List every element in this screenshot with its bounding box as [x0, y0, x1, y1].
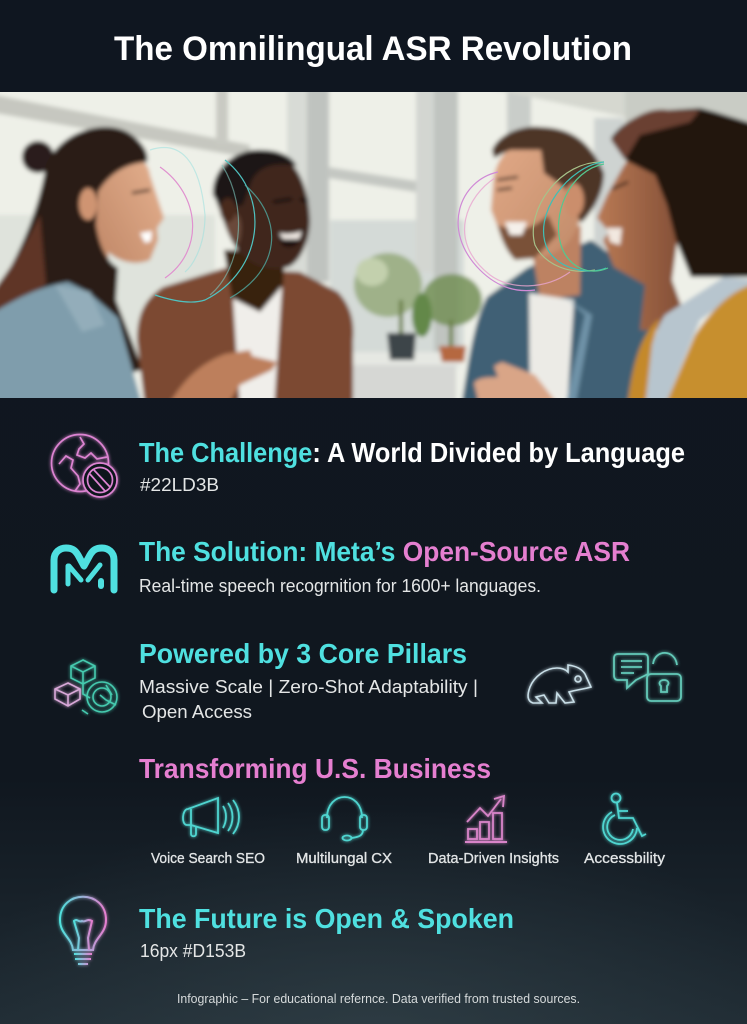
heading: the future: The Future is Open & Spoken [139, 903, 514, 934]
icon: globe with prohibition sign [52, 434, 117, 497]
icon: light bulb [60, 897, 106, 964]
icon: headset [322, 797, 367, 840]
icon: rising bar chart [465, 796, 507, 842]
text: pillars list: Massive Scale | Zero-Shot Adaptability | [139, 677, 478, 697]
person 3: man in denim jacket [461, 127, 661, 408]
icon: Meta M logo [54, 548, 114, 590]
icon: cubes and target [55, 660, 117, 714]
label: Accessbility [584, 851, 666, 867]
section: transforming U.S. business [139, 753, 666, 867]
text: solution detail: Real-time speech recogrnition for 1600+ languages. [139, 576, 541, 596]
person 4: woman with curly hair [597, 108, 747, 408]
item: multilingual CX [296, 797, 392, 867]
person 2: man in brown shirt [137, 150, 353, 408]
text: challenge detail: #22LD3B [140, 475, 219, 495]
plants [354, 253, 482, 362]
icon: megaphone [183, 798, 239, 836]
photo: four people talking by a window [0, 82, 747, 408]
section: the future [60, 897, 514, 964]
item: data-driven insights [428, 796, 559, 867]
label: Multilungal CX [296, 851, 392, 867]
heading: the solution: The Solution: Meta’s Open-Source ASR [139, 536, 630, 567]
window panes and frames [0, 82, 747, 368]
text: pillars list [139, 677, 478, 722]
laptop [350, 364, 457, 398]
person 1: woman with bun [0, 127, 164, 408]
icon: speech bubble with open lock [614, 653, 681, 701]
text: future detail: 16px #D153B [140, 941, 246, 961]
section: the challenge [52, 434, 685, 497]
icon: rodent mascot [528, 665, 591, 703]
label: Data-Driven Insights [428, 851, 559, 867]
sound wave arcs [150, 148, 608, 302]
label: Voice Search SEO [151, 851, 265, 867]
item: accessibility [584, 794, 666, 867]
heading: the challenge: The Challenge: A World Divided by Language [139, 437, 685, 468]
text: pillars list: Open Access [142, 702, 252, 722]
heading: core pillars: Powered by 3 Core Pillars [139, 638, 467, 669]
icon: wheelchair [603, 794, 646, 844]
item: voice search SEO [151, 798, 265, 867]
heading: transforming business: Transforming U.S. Business [139, 753, 491, 784]
footer note: Infographic – For educational refernce. Data verified from trusted sources. [177, 991, 580, 1006]
title: The Omnilingual ASR Revolution [114, 30, 632, 68]
section: the solution [54, 536, 630, 596]
section: core pillars [55, 638, 681, 722]
